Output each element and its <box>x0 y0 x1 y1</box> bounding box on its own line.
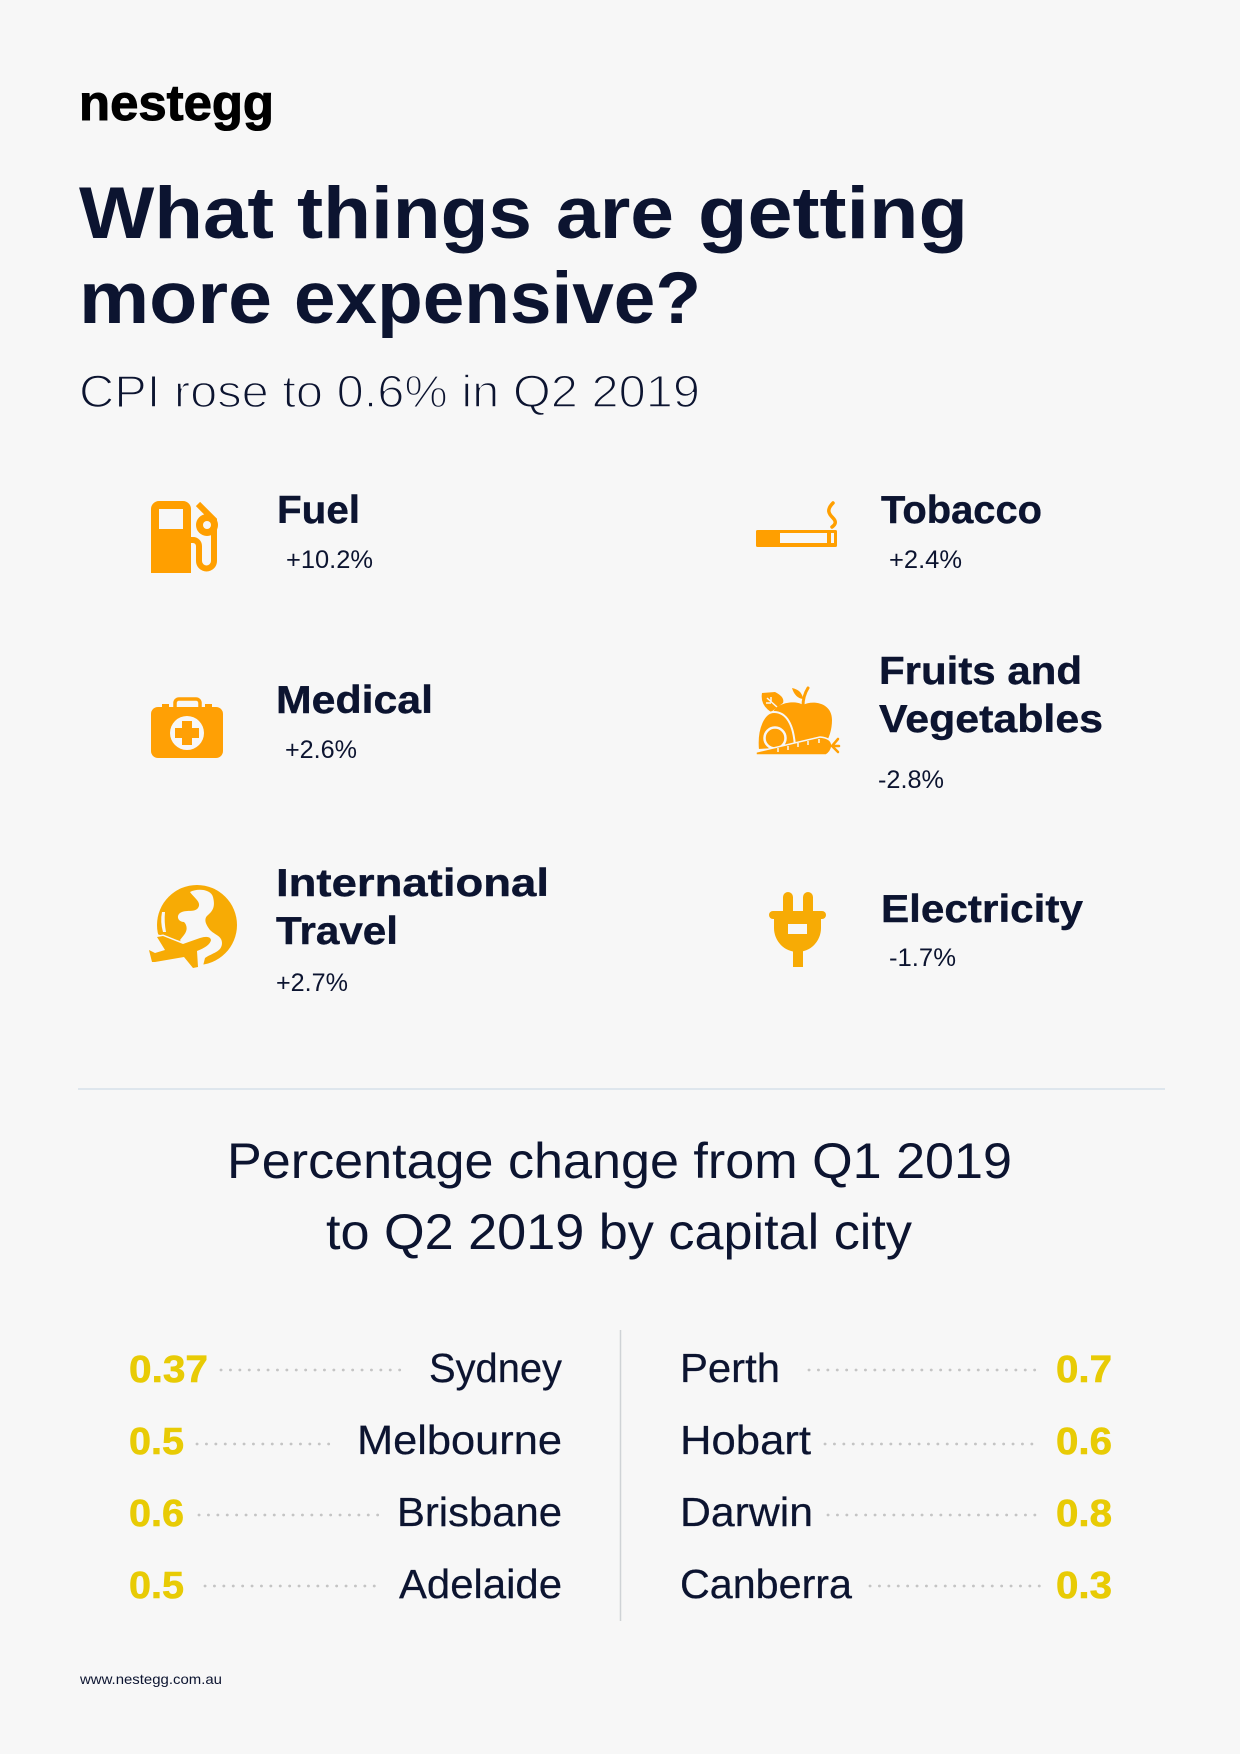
value: medical: +2.6% <box>285 736 357 764</box>
label: tobacco: Tobacco <box>881 489 1042 532</box>
row: Hobart: Hobart <box>680 1417 812 1463</box>
row: Darwin: Darwin <box>680 1489 813 1535</box>
panel: tobacco <box>756 489 1042 574</box>
panel: medical <box>151 679 433 764</box>
icon: fruit and vegetables <box>756 688 839 755</box>
value: fuel: +10.2% <box>286 546 373 574</box>
icon: globe and plane <box>149 885 237 972</box>
value: tobacco: +2.4% <box>889 546 962 574</box>
value: fruits and vegetables: -2.8% <box>878 766 944 794</box>
label: fruits and vegetables <box>879 650 1103 741</box>
row: Adelaide: 0.5 <box>129 1565 184 1607</box>
panel: international travel <box>149 862 549 997</box>
title: expensive? <box>294 258 701 339</box>
icon: fuel pump <box>151 501 218 573</box>
title: getting <box>698 173 968 254</box>
row: Adelaide: Adelaide <box>399 1561 562 1607</box>
row: Perth <box>680 1345 1112 1391</box>
section heading <box>227 1133 1012 1260</box>
row: Perth: 0.7 <box>1056 1349 1112 1391</box>
label: fruits and vegetables: Vegetables <box>879 698 1103 741</box>
label: fuel: Fuel <box>277 489 360 532</box>
row: Canberra: 0.3 <box>1056 1565 1112 1607</box>
row: Adelaide <box>129 1561 562 1607</box>
city list: left column <box>129 1345 562 1607</box>
row: Brisbane: 0.6 <box>129 1493 184 1535</box>
panel: electricity <box>769 888 1083 972</box>
section heading: to Q2 2019 by capital city <box>326 1204 912 1260</box>
label: medical: Medical <box>276 679 433 722</box>
title: things <box>297 173 532 254</box>
logo: nestegg: nestegg <box>79 75 274 131</box>
city list: right column <box>680 1345 1112 1607</box>
value: international travel: +2.7% <box>276 969 348 997</box>
title: are <box>556 173 674 254</box>
title: What <box>79 173 274 254</box>
row: Canberra <box>680 1561 1112 1607</box>
icon: plug <box>769 892 826 967</box>
row: Sydney <box>129 1345 562 1391</box>
label: international travel <box>276 862 549 953</box>
icon: cigarette <box>756 503 837 547</box>
row: Melbourne: 0.5 <box>129 1421 184 1463</box>
value: electricity: -1.7% <box>889 944 956 972</box>
panel: fruits and vegetables <box>756 650 1103 794</box>
label: international travel: International <box>276 862 549 905</box>
label: electricity: Electricity <box>881 888 1083 931</box>
row: Brisbane <box>129 1489 562 1535</box>
subtitle: CPI rose to 0.6% in Q2 2019 <box>79 366 700 417</box>
row: Sydney: Sydney <box>429 1345 562 1391</box>
row: Canberra: Canberra <box>680 1561 852 1607</box>
title: more <box>79 258 272 339</box>
label: fruits and vegetables: Fruits and <box>879 650 1082 693</box>
title <box>79 173 968 339</box>
row: Perth: Perth <box>680 1345 780 1391</box>
label: international travel: Travel <box>276 910 398 953</box>
row: Darwin: 0.8 <box>1056 1493 1112 1535</box>
row: Hobart <box>680 1417 1112 1463</box>
row: Darwin <box>680 1489 1112 1535</box>
row: Melbourne: Melbourne <box>357 1417 562 1463</box>
row: Melbourne <box>129 1417 562 1463</box>
row: Brisbane: Brisbane <box>397 1489 562 1535</box>
panel: fuel <box>151 489 373 574</box>
row: Hobart: 0.6 <box>1056 1421 1112 1463</box>
row: Sydney: 0.37 <box>129 1349 208 1391</box>
section heading: Percentage change from Q1 2019 <box>227 1133 1012 1189</box>
footer url: www.nestegg.com.au <box>79 1671 222 1687</box>
icon: first aid kit <box>151 699 223 758</box>
